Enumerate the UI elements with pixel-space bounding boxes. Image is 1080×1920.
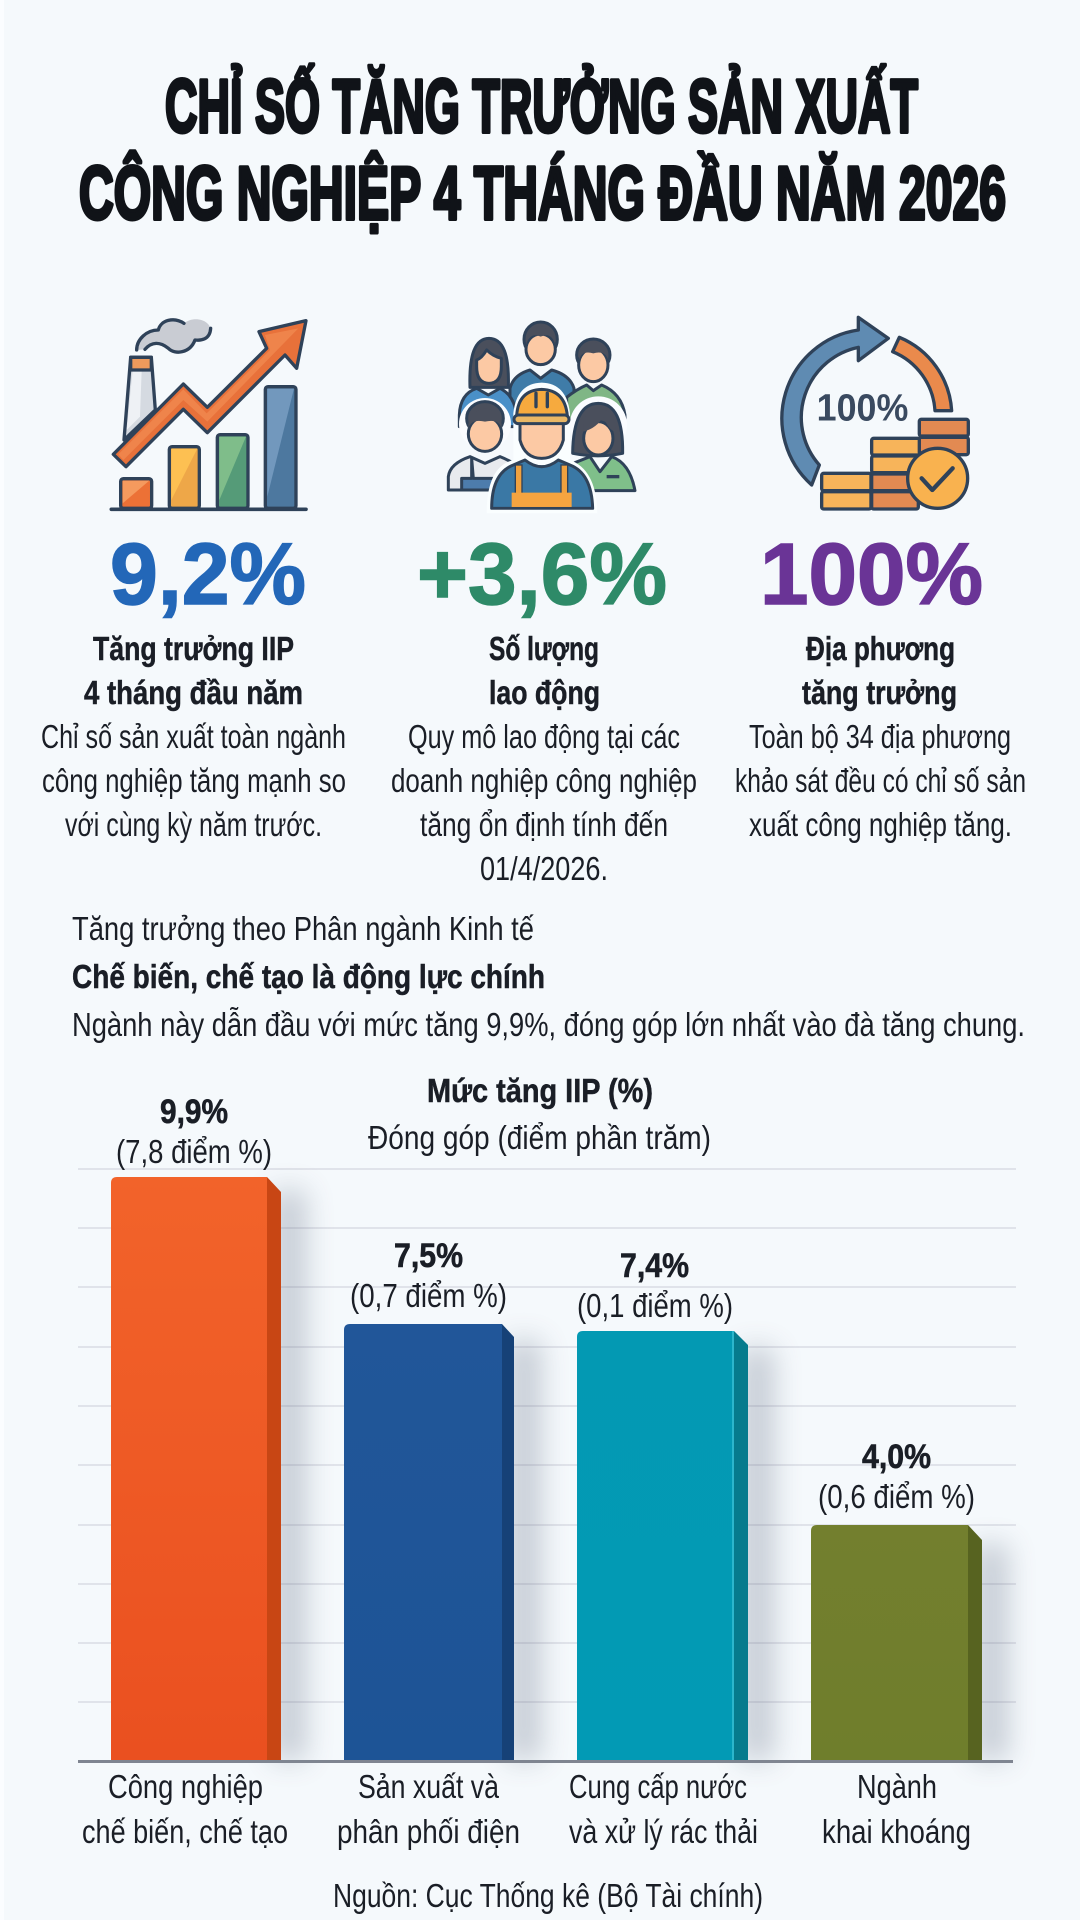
bar: mining — [811, 1438, 982, 1760]
icon: 100 percent cycle and coins: 100% — [817, 387, 908, 430]
stat: IIP growth: Chỉ số sản xuất toàn ngành — [41, 718, 346, 755]
stat: labour: 01/4/2026. — [480, 850, 608, 887]
x axis labels: Cung cấp nước — [569, 1768, 747, 1805]
legend: Đóng góp (điểm phần trăm) — [368, 1119, 711, 1156]
x axis labels — [82, 1768, 971, 1850]
bar: mining: (0,6 điểm %) — [818, 1478, 975, 1515]
x axis labels: Ngành — [857, 1768, 937, 1805]
icon: group of workers — [447, 322, 638, 513]
stat: IIP growth — [41, 526, 346, 843]
stat: labour — [391, 526, 697, 887]
stat: IIP growth: với cùng kỳ năm trước. — [65, 806, 322, 843]
legend: Mức tăng IIP (%) — [427, 1072, 653, 1109]
bar: water and waste: 7,4% — [620, 1247, 689, 1285]
section heading: Tăng trưởng theo Phân ngành Kinh tế — [72, 910, 534, 947]
title — [79, 64, 1006, 235]
stat: localities: tăng trưởng — [802, 674, 957, 711]
bar: electricity: (0,7 điểm %) — [350, 1277, 507, 1314]
bar chart — [78, 1072, 1016, 1850]
x axis labels: chế biến, chế tạo — [82, 1813, 288, 1850]
stat: IIP growth: Tăng trưởng IIP — [93, 630, 294, 667]
bar: electricity: 7,5% — [394, 1237, 463, 1275]
bar: electricity — [344, 1237, 514, 1760]
bar: manufacturing: (7,8 điểm %) — [116, 1133, 272, 1170]
x axis labels: Công nghiệp — [108, 1768, 263, 1805]
stat: localities: Địa phương — [806, 630, 955, 667]
bar: manufacturing — [111, 1093, 281, 1760]
stat: IIP growth: 9,2% — [110, 526, 306, 623]
stat: localities: 100% — [760, 526, 983, 623]
section heading — [72, 910, 1025, 1043]
bar: mining: 4,0% — [862, 1438, 931, 1476]
stat: labour: tăng ổn định tính đến — [420, 806, 668, 843]
x axis labels: và xử lý rác thải — [569, 1813, 758, 1850]
stat: localities: xuất công nghiệp tăng. — [749, 806, 1012, 843]
stat: labour: doanh nghiệp công nghiệp — [391, 762, 697, 799]
stat: localities — [735, 526, 1026, 843]
bar: water and waste — [577, 1247, 748, 1760]
icon: factory chart with rising arrow — [111, 319, 306, 509]
source note: Nguồn: Cục Thống kê (Bộ Tài chính) — [333, 1877, 763, 1914]
bar: manufacturing: 9,9% — [160, 1093, 228, 1131]
stat: labour: lao động — [489, 674, 600, 711]
bar: water and waste: (0,1 điểm %) — [577, 1287, 733, 1324]
stat: IIP growth: 4 tháng đầu năm — [84, 674, 303, 711]
icon: 100 percent cycle and coins — [782, 317, 968, 509]
stat: labour: Số lượng — [489, 630, 599, 667]
stat: IIP growth: công nghiệp tăng mạnh so — [42, 762, 346, 799]
x axis labels: khai khoáng — [822, 1813, 971, 1850]
stat: labour: Quy mô lao động tại các — [408, 718, 680, 755]
legend — [368, 1072, 711, 1156]
x axis labels: phân phối điện — [337, 1813, 520, 1850]
x axis labels: Sản xuất và — [358, 1768, 500, 1805]
section heading: Chế biến, chế tạo là động lực chính — [72, 958, 545, 995]
stat: labour: +3,6% — [417, 526, 667, 623]
